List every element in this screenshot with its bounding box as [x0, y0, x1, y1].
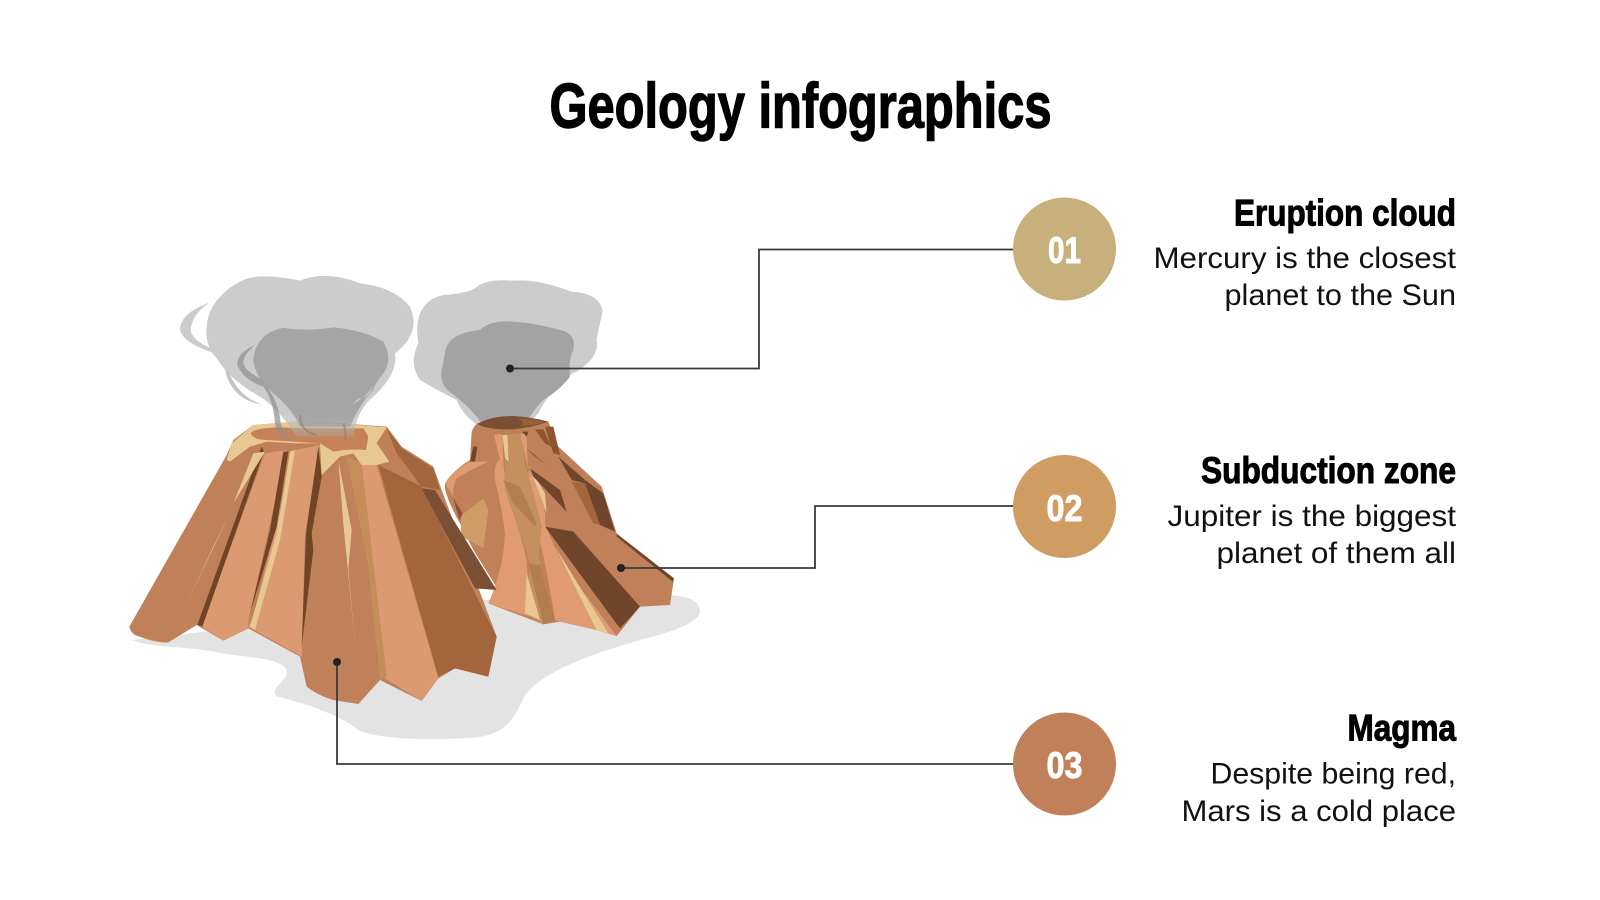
text block: magma: Despite being red, — [1210, 758, 1456, 790]
badge 01 — [1013, 198, 1116, 300]
text block: eruption cloud: planet to the Sun — [1224, 279, 1456, 312]
small volcano — [445, 416, 674, 636]
badge 03 — [1013, 712, 1116, 816]
connector 02 — [617, 506, 1014, 572]
text block: subduction zone: Subduction zone — [1201, 450, 1456, 491]
text block: eruption cloud: Eruption cloud — [1234, 192, 1456, 234]
text block: eruption cloud — [1154, 192, 1457, 312]
text block: subduction zone — [1168, 450, 1457, 570]
ground shadow — [132, 595, 700, 739]
text block: subduction zone: Jupiter is the biggest — [1168, 500, 1457, 533]
badge 02: 02 — [1046, 488, 1082, 529]
text block: magma — [1182, 708, 1456, 828]
connector 03 — [333, 658, 1014, 764]
illustration: volcanoes — [129, 276, 700, 739]
text block: subduction zone: planet of them all — [1216, 537, 1456, 570]
badge 02 — [1013, 455, 1116, 558]
connector 01 — [506, 250, 1014, 372]
large eruption cloud — [180, 276, 414, 440]
text block: eruption cloud: Mercury is the closest — [1154, 242, 1457, 275]
small eruption cloud — [414, 280, 603, 427]
text block: magma: Magma — [1348, 708, 1456, 748]
badge 01: 01 — [1048, 230, 1081, 271]
title: Geology infographics — [550, 72, 1052, 142]
badge 03: 03 — [1046, 745, 1082, 786]
text block: magma: Mars is a cold place — [1182, 795, 1456, 828]
large volcano — [129, 421, 497, 704]
